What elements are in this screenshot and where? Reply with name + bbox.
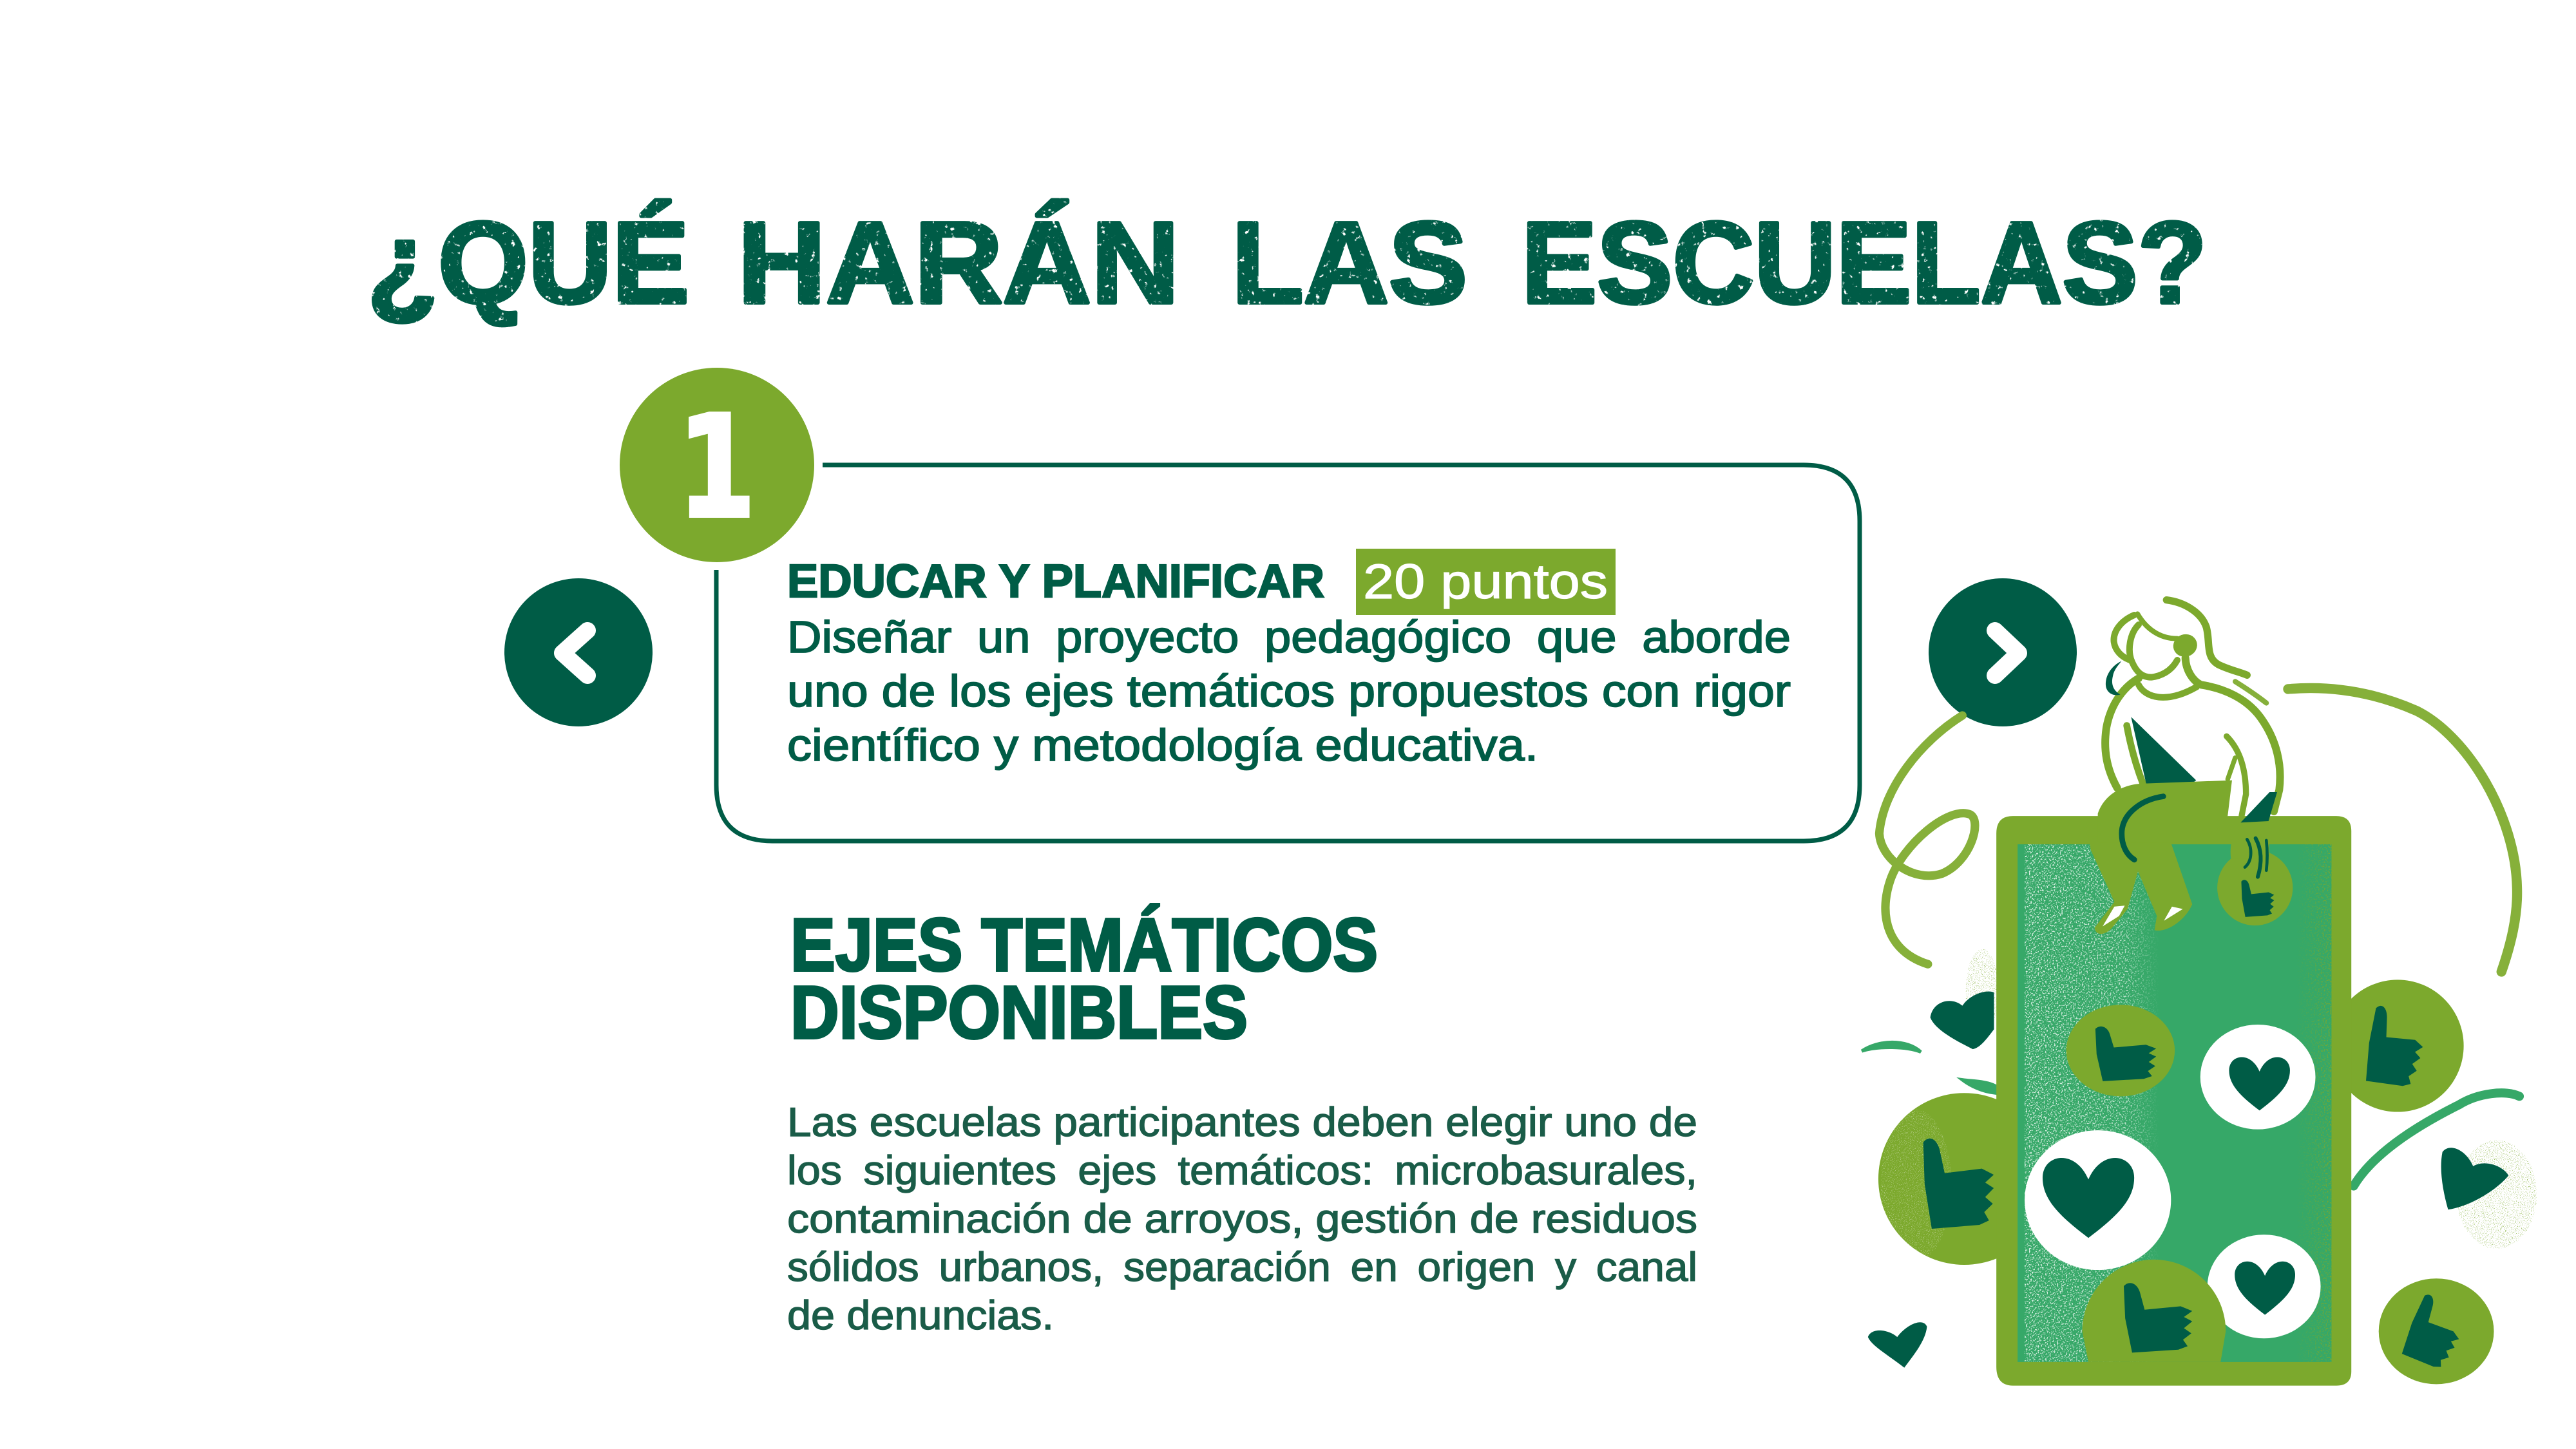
heading: ejes temáticos disponibles: DISPONIBLES [790,971,1248,1054]
badge: step number 1: 1 [678,386,756,549]
arrow: previous [504,578,653,726]
speckle: around right heart [2457,1141,2537,1249]
swoosh: right [2354,1093,2519,1186]
heading: ejes temáticos disponibles: EJES TEMÁTICOS [790,903,1378,987]
icon: thumb bubble lower right [2379,1278,2494,1384]
person legs [2088,836,2192,934]
icon: thumb bubble right [2331,980,2464,1112]
badge: 20 puntos: 20 puntos [1363,554,1608,609]
text block: step description: uno de los ejes temáticos propuestos con rigor [787,666,1791,716]
illustration: person on phone with likes and hearts [1862,600,2537,1386]
text block: ejes description: contaminación de arroyos, gestión de residuos [787,1197,1697,1242]
text block: ejes description: Las escuelas participantes deben elegir uno de [787,1100,1697,1145]
panel: step card outline [716,465,1860,841]
icon: thumb bubble bottom [2083,1260,2226,1362]
icon: thumb bubble large left [1878,1093,2050,1265]
icon: heart bubble large [2025,1130,2171,1270]
hearts [1868,992,2508,1368]
icon: heart bubble lower [2208,1235,2321,1338]
swoosh: left [1862,1042,1996,1093]
speckle: left of phone [1966,949,1999,1034]
text block: ejes description: los siguientes ejes temáticos: microbasurales, [787,1148,1697,1193]
title: ESCUELAS? [1522,198,2207,328]
arrow: next [1929,578,2077,726]
text block: step description [787,612,1791,770]
phone screen [2018,844,2331,1362]
icon: thumb bubble mid [2066,1005,2175,1096]
text block: step description: científico y metodología educativa. [787,720,1538,770]
title: HARÁN [738,198,1179,328]
thumbs [1923,880,2471,1374]
text block: ejes description: de denuncias. [787,1293,1054,1338]
heading: ejes temáticos disponibles [790,903,1378,1054]
screen grain left [2025,844,2159,1362]
text block: ejes description [787,1100,1697,1338]
title: LAS [1232,198,1467,328]
person upper body [2098,600,2280,877]
grain on large left bubble [1881,1110,1952,1260]
screen shade right [2296,844,2331,1362]
text block: ejes description: sólidos urbanos, separación en origen y canal [787,1245,1697,1290]
badge: 20 puntos [1356,549,1616,615]
phone frame [1996,816,2351,1386]
decorative curl: left [1879,715,1975,964]
text block: step description: Diseñar un proyecto pedagógico que aborde [787,612,1791,662]
step heading: EDUCAR Y PLANIFICAR [787,556,1324,607]
title: ¿QUÉ [367,198,689,328]
decorative arc: right [2288,688,2517,972]
title [367,198,2207,328]
icon: thumb bubble top [2217,850,2293,925]
badge: step number 1 [620,368,814,562]
icon: heart bubble mid [2200,1025,2316,1130]
